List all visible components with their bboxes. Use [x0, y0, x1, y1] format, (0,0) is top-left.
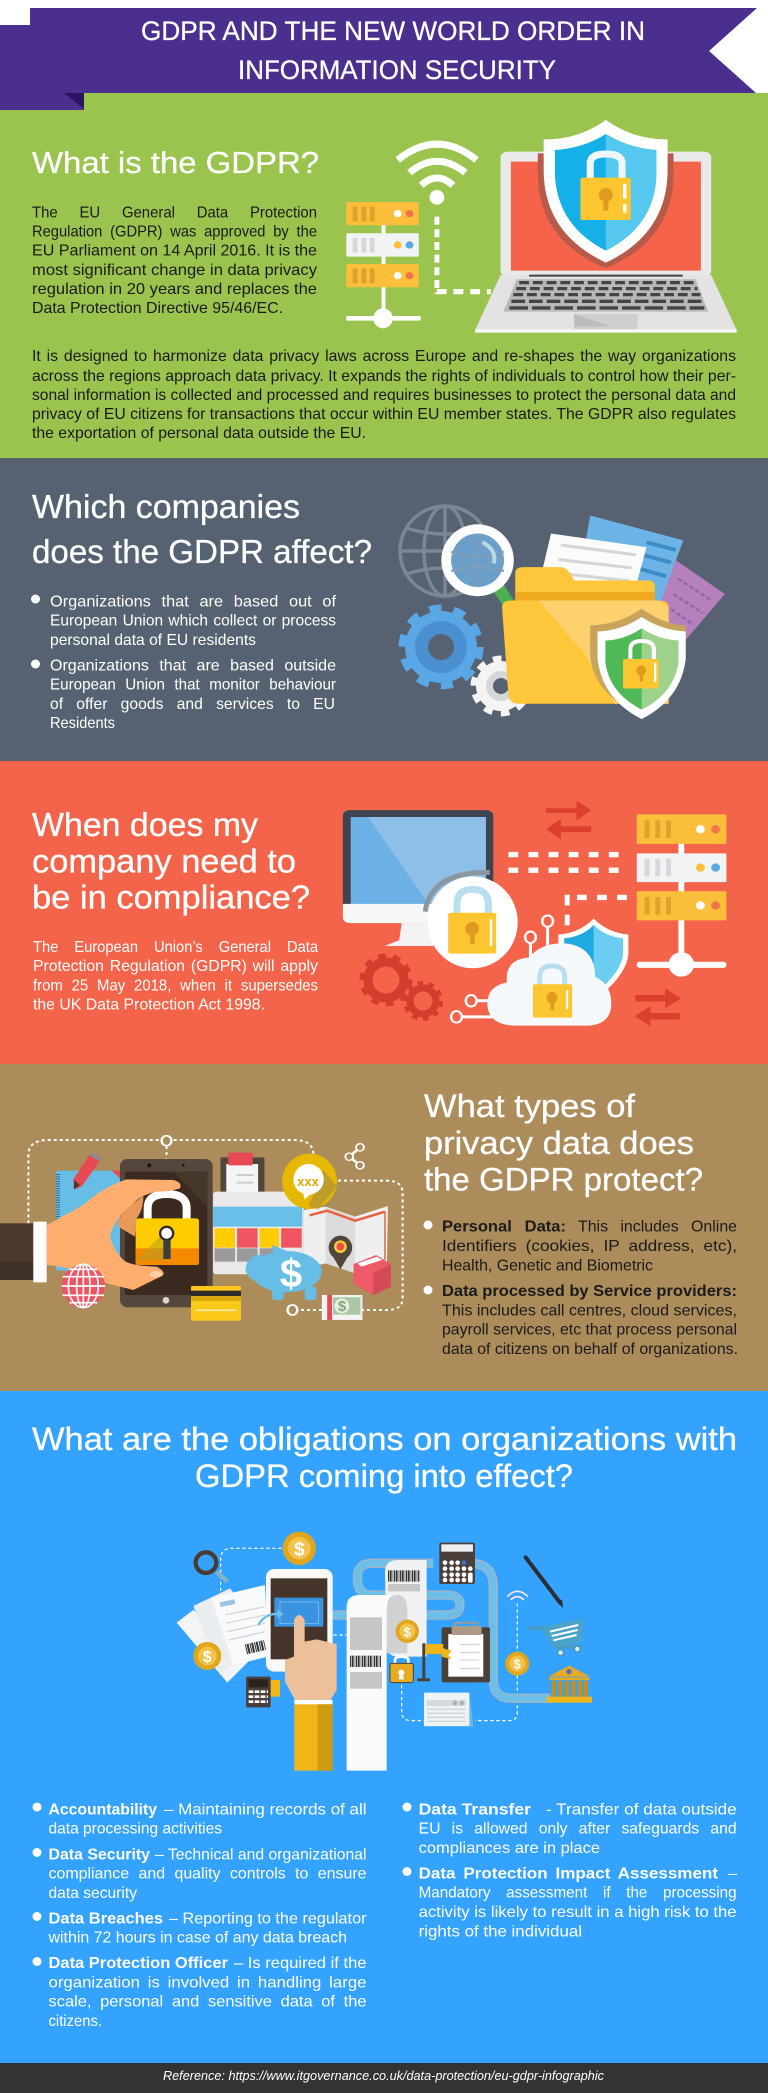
list: obligations left column: citizens.: [48, 2013, 102, 2030]
list: obligations left column: Accountability: [48, 1801, 157, 1818]
icon: speech badge: [282, 1154, 337, 1209]
text: GDPR approval: Regulation (GDPR) was approved by the: [32, 224, 317, 241]
list: data types: This includes call centres, cloud services,: [442, 1302, 737, 1319]
icon: magnifying glass: [441, 524, 515, 607]
heading: obligations: What are the obligations on organizations with: [32, 1421, 737, 1457]
icon: globe: [400, 506, 490, 596]
icon: shopping cart: [528, 1618, 584, 1656]
icon: transfer arrows bottom: [635, 988, 681, 1026]
icon: shield: [558, 918, 628, 994]
title: GDPR AND THE NEW WORLD ORDER IN: [141, 16, 645, 46]
list: obligations left column: – Reporting to the regulator: [169, 1910, 367, 1927]
list: obligations right column: –: [728, 1865, 737, 1882]
text: GDPR approval: most significant change in data privacy: [32, 262, 317, 279]
list: obligations left column: – Technical and organizational: [155, 1846, 366, 1863]
heading: compliance date: [32, 806, 310, 916]
list: data types: Identifiers (cookies, IP address, etc),: [442, 1238, 737, 1255]
text: GDPR purpose: across the regions approach data privacy. It expands the rights of individuals to control how their per-: [32, 368, 736, 385]
title: [141, 16, 645, 85]
icon: cloud with padlock: [451, 915, 611, 1026]
text: GDPR purpose: the exportation of personal data outside the EU.: [32, 425, 366, 442]
list: obligations left column: within 72 hours in case of any data breach: [48, 1930, 347, 1947]
list: obligations left column: Data Security: [48, 1846, 150, 1863]
icon: coin left: [193, 1642, 221, 1670]
icon: small calculator and card: [246, 1677, 280, 1707]
icon: location pin: [329, 1236, 352, 1269]
icon: padlock: [390, 1657, 413, 1683]
list: affected organizations: European Union which collect or process: [50, 613, 336, 630]
icon: red gears: [362, 956, 441, 1019]
panel: what is the GDPR: [0, 93, 768, 458]
icon: documents: [177, 1585, 268, 1683]
list: obligations left column: Data Protection Officer: [48, 1955, 228, 1972]
icon: wifi: [398, 144, 491, 294]
icon: magnifying glass: [196, 1552, 227, 1582]
icon: coin right: [505, 1652, 529, 1676]
footer: reference: [0, 2063, 768, 2093]
text: GDPR approval: The EU General Data Protection: [32, 204, 317, 222]
icon: coin middle: $: [404, 1625, 411, 1639]
list: obligations right column: Data Transfer: [419, 1801, 531, 1818]
heading: privacy data: the GDPR protect?: [424, 1162, 703, 1198]
heading: which companies: Which companies: [32, 488, 300, 525]
text: compliance date: from 25 May 2018, when it supersedes: [33, 977, 318, 994]
icon: server rack: [346, 202, 421, 328]
heading: which companies: does the GDPR affect?: [32, 533, 372, 570]
list: affected organizations: Residents: [50, 715, 115, 732]
heading: privacy data: What types of: [424, 1088, 635, 1124]
heading: privacy data: privacy data does: [424, 1125, 694, 1161]
text: GDPR purpose: [32, 348, 736, 442]
icon: banknote: [322, 1295, 362, 1320]
icon: tablet with tiles: [213, 1192, 304, 1274]
list: obligations left column: – Maintaining records of all: [164, 1801, 366, 1818]
dashed connectors: [221, 1548, 517, 1721]
list: obligations left column: data processing activities: [48, 1821, 222, 1838]
heading: which companies: [32, 488, 372, 570]
illustration: wifi, server and laptop with shield: [346, 120, 737, 333]
icon: pencil: [73, 1152, 102, 1189]
text: compliance date: The European Union’s General Data: [33, 939, 318, 956]
icon: coin middle: [396, 1620, 419, 1643]
icon: notebook: [56, 1171, 120, 1271]
list: obligations left column: scale, personal and sensitive data of the: [48, 1994, 367, 2011]
icon: smartphone: [120, 1159, 213, 1307]
list: data types: data of citizens on behalf of organizations.: [442, 1341, 738, 1358]
list: obligations right column: [402, 1801, 737, 1940]
text: GDPR purpose: sonal information is collected and processed and requires businesses to protect the personal data and: [32, 387, 736, 404]
text: GDPR approval: EU Parliament on 14 April 2016. It is the: [32, 243, 317, 260]
dashed connectors: [508, 852, 627, 925]
heading: what is the GDPR: What is the GDPR?: [32, 145, 319, 180]
illustration: monitor, cloud and servers: [343, 801, 726, 1026]
icon: pen: [526, 1557, 563, 1608]
icon: blue gear: [403, 609, 479, 685]
icon: laptop: [475, 152, 737, 333]
icon: pointing hand and sleeve: [285, 1615, 337, 1771]
heading: compliance date: When does my: [32, 806, 259, 843]
list: obligations left column: organization is involved in handling large: [48, 1974, 367, 1991]
icon: server rack: [637, 814, 726, 977]
list: data types: payroll services, etc that process personal: [442, 1322, 737, 1339]
panel: obligations on organizations: [0, 1391, 768, 2063]
dashed network lines: [28, 1140, 403, 1310]
icon: sleeve and cuff: [0, 1222, 47, 1282]
icon: coin top: [283, 1532, 316, 1565]
icon: clipboard: [220, 1153, 264, 1194]
list: data types: [424, 1219, 738, 1358]
icon: green shield: [590, 608, 686, 719]
label: piggy bank dollar: $: [280, 1252, 302, 1296]
list: obligations right column: compliances are in place: [419, 1840, 600, 1857]
icon: bank building: [547, 1666, 592, 1703]
list: obligations left column: – Is required if the: [234, 1955, 367, 1972]
banner: title ribbon: [0, 8, 757, 110]
list: obligations right column: EU is allowed only after safeguards and: [419, 1821, 737, 1838]
illustration: payment and compliance workflow: [177, 1532, 592, 1771]
list: affected organizations: [31, 594, 337, 732]
list: data types: Data processed by Service providers:: [442, 1283, 737, 1300]
panel: what types of privacy data does the GDPR protect: [0, 1064, 768, 1391]
icon: piggy bank: [245, 1245, 322, 1300]
heading: compliance date: be in compliance?: [32, 878, 310, 916]
list: affected organizations: of offer goods and services to EU: [50, 696, 335, 713]
list: obligations right column: activity is likely to result in a high risk to the: [419, 1904, 737, 1921]
text: GDPR approval: Data Protection Directive 95/46/EC.: [32, 300, 283, 317]
icon: red globe: [62, 1264, 105, 1308]
list: affected organizations: Organizations that are based out of: [50, 594, 337, 611]
icon: coin top: $: [294, 1540, 305, 1561]
label: speech badge text: xxx: [297, 1174, 320, 1189]
icon: monitor: [343, 810, 493, 946]
list: obligations left column: compliance and quality controls to ensure: [48, 1866, 367, 1883]
icon: security shield with padlock: [538, 120, 673, 268]
list: affected organizations: personal data of EU residents: [50, 632, 256, 649]
list: obligations right column: - Transfer of data outside: [546, 1801, 737, 1818]
icon: network nodes: [162, 1136, 297, 1315]
text: GDPR purpose: privacy of EU citizens for transactions that occur within EU member states. The GDPR also regulates: [32, 406, 736, 423]
list: obligations left column: Data Breaches: [48, 1910, 163, 1927]
list: obligations right column: Data Protection Impact Assessment: [419, 1865, 719, 1882]
icon: padlock: [136, 1194, 199, 1265]
list: data types: This includes Online: [578, 1219, 737, 1236]
panel: which companies does the GDPR affect: [0, 458, 768, 761]
label: banknote dollar: $: [338, 1298, 347, 1315]
heading: compliance date: company need to: [32, 842, 296, 880]
illustration: globe, folder and shield: [400, 506, 725, 719]
text: compliance date: Protection Regulation (GDPR) will apply: [33, 958, 318, 975]
text: GDPR approval: regulation in 20 years and replaces the: [32, 281, 317, 298]
icon: receipts: [347, 1560, 427, 1771]
icon: transfer arrows top: [546, 801, 591, 840]
heading: obligations: GDPR coming into effect?: [195, 1458, 573, 1494]
list: obligations left column: [32, 1801, 367, 2030]
list: obligations right column: Mandatory assessment if the processing: [419, 1885, 737, 1902]
icon: coin left: $: [203, 1649, 212, 1666]
data pipeline: [332, 1563, 550, 1698]
icon: coin right: $: [514, 1658, 521, 1672]
icon: hand: [47, 1179, 181, 1290]
icon: documents: [541, 515, 725, 651]
list: affected organizations: European Union that monitor behaviour: [50, 677, 337, 694]
list: obligations left column: data security: [48, 1885, 137, 1902]
icon: share: [345, 1144, 364, 1169]
icon: credit card: [191, 1286, 241, 1321]
list: affected organizations: Organizations that are based outside: [50, 658, 336, 674]
icon: wifi: [507, 1591, 528, 1600]
text: GDPR approval: [32, 204, 317, 317]
icon: folder: [502, 567, 669, 704]
list: data types: Health, Genetic and Biometric: [442, 1257, 653, 1274]
icon: white gear: [474, 659, 528, 713]
icon: calculator: [439, 1543, 475, 1584]
list: data types: Personal Data:: [442, 1219, 566, 1236]
icon: calendar: [424, 1693, 473, 1727]
panel: when does my company need to be in compliance: [0, 761, 768, 1064]
footer: reference: Reference: https://www.itgovernance.co.uk/data-protection/eu-gdpr-infographic: [163, 2069, 605, 2083]
icon: parcel box: [354, 1255, 391, 1295]
list: obligations right column: rights of the individual: [419, 1923, 582, 1940]
text: compliance date: the UK Data Protection Act 1998.: [33, 997, 265, 1014]
title: INFORMATION SECURITY: [238, 55, 556, 85]
heading: obligations: [32, 1421, 737, 1494]
icon: folded map: [304, 1206, 388, 1273]
icon: smartphone: [258, 1569, 333, 1672]
icon: clipboard with flag: [417, 1623, 490, 1682]
icon: padlock badge: [428, 876, 518, 968]
heading: privacy data: [424, 1088, 703, 1198]
illustration: hand locking phone with data icons: [0, 1136, 403, 1321]
text: compliance date: [33, 939, 318, 1014]
text: GDPR purpose: It is designed to harmonize data privacy laws across Europe and re-shapes the way organizations: [32, 348, 736, 365]
